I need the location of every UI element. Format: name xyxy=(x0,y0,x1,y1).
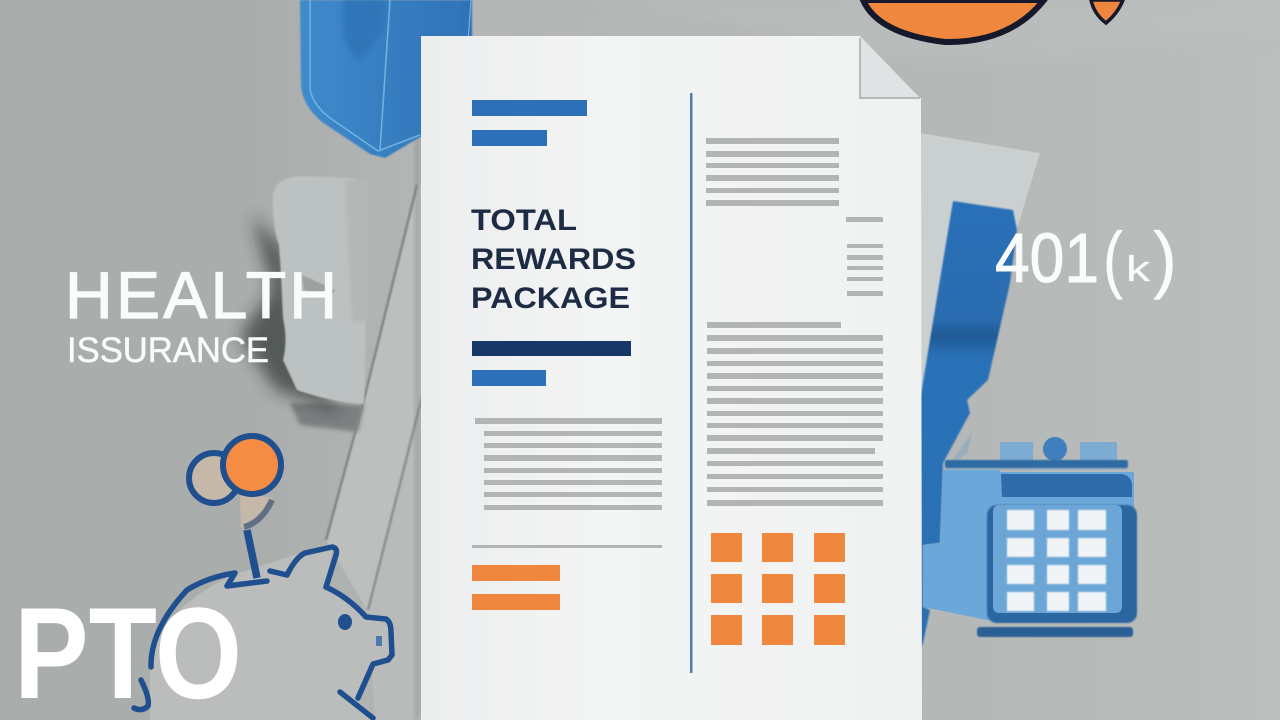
label: health insurance: HEALTH xyxy=(65,258,337,332)
icon: blue shield xyxy=(300,0,475,158)
label: 401(k): ) xyxy=(1153,217,1177,300)
label: health insurance xyxy=(65,258,337,370)
document page xyxy=(421,36,922,720)
title: PACKAGE xyxy=(471,282,630,315)
left text block xyxy=(475,418,662,510)
back sheet left xyxy=(290,130,425,720)
label: 401(k): k xyxy=(1126,248,1151,289)
title xyxy=(471,204,636,315)
page fold xyxy=(860,36,920,98)
icon: piggy bank xyxy=(134,530,392,720)
torn paper shape xyxy=(240,176,368,412)
title: TOTAL xyxy=(471,204,577,237)
label: 401(k): 401 xyxy=(995,219,1099,297)
calculator keys xyxy=(1007,510,1106,611)
thin rule xyxy=(472,545,662,548)
back sheet right xyxy=(920,133,1040,400)
icon: blue calculator xyxy=(923,432,1137,637)
header bars xyxy=(472,100,587,146)
title: REWARDS xyxy=(471,243,636,276)
title underline bars xyxy=(472,341,631,386)
blue ribbon xyxy=(920,201,1017,650)
column divider xyxy=(690,93,692,673)
label: 401(k) xyxy=(995,217,1177,300)
icon: orange coin top xyxy=(863,0,1123,42)
orange squares grid xyxy=(711,533,845,645)
right text block top xyxy=(706,138,839,206)
label: 401(k): ( xyxy=(1103,217,1123,300)
label: health insurance: ISSURANCE xyxy=(67,331,269,370)
orange bars xyxy=(472,565,560,610)
small text block xyxy=(846,217,883,296)
right text block lower xyxy=(707,322,883,506)
icon: coins xyxy=(189,436,281,528)
back sheet top xyxy=(590,0,1280,60)
